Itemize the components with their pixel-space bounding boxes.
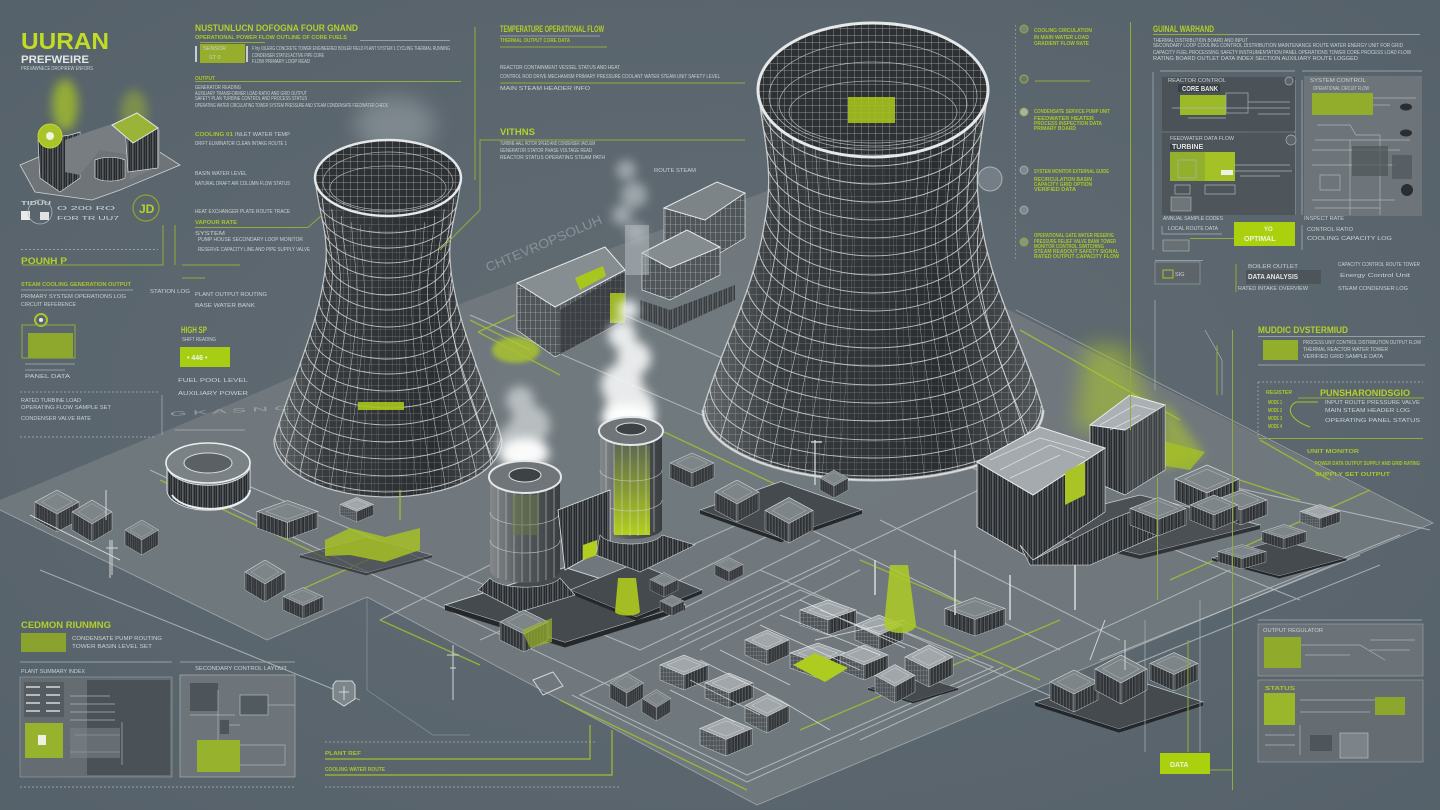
bottom left panel: CONDENSATE PUMP ROUTING — [72, 636, 162, 642]
top central text block two: THERMAL OUTPUT CORE DATA — [500, 38, 570, 44]
connecting hall — [558, 490, 610, 570]
reactor complex — [445, 417, 743, 652]
isometric ground plate — [0, 190, 1433, 805]
left mid panel: CONDENSER VALVE RATE — [21, 416, 91, 422]
top central text block one: RESERVE CAPACITY LINE AND PIPE SUPPLY VALVE — [198, 247, 310, 253]
top central text block two: CONTROL ROD DRIVE MECHANISM PRIMARY PRESSURE COOLANT WATER STEAM UNIT SAFETY LEVEL — [500, 74, 720, 80]
top central text block one: OPERATING WATER CIRCULATING TOWER SYSTEM PRESSURE AND STEAM CONDENSATE FEEDWATER CHECK — [195, 103, 388, 109]
top central text block one: OUTPUT — [195, 76, 216, 82]
left green block cluster — [300, 490, 432, 575]
top central text block one: SENSOR — [203, 46, 226, 52]
top left isometric model: TIDUU — [21, 201, 51, 207]
panel: lower left schematic — [1162, 77, 1296, 215]
top central text block two: TURBINE HALL ROTOR SPEED AND CONDENSER VACUUM — [500, 141, 595, 147]
top central text block one: DRIFT ELIMINATOR CLEAN INTAKE ROUTE 1 — [195, 141, 287, 147]
left mid panel: STATION LOG — [150, 289, 190, 295]
right mid strip: CAPACITY CONTROL ROUTE TOWER — [1338, 262, 1420, 268]
right mid strip — [1155, 260, 1420, 395]
right lower text panels: INPUT ROUTE PRESSURE VALVE — [1325, 400, 1420, 406]
callout: high speed: • 446 • — [187, 355, 208, 362]
right timeline: CAPACITY GRID OPTION — [1034, 182, 1092, 188]
right lower text panels: MODE 3 — [1268, 416, 1282, 422]
top central text block two: GENERATOR STATOR PHASE VOLTAGE READ — [500, 148, 592, 154]
back building C — [664, 182, 745, 262]
right top panel: RATING BOARD OUTLET DATA INDEX SECTION AUXILIARY ROUTE LOGGED — [1153, 56, 1358, 62]
bottom left panel: PLANT SUMMARY INDEX — [21, 669, 85, 675]
left mid panel: PANEL DATA — [25, 374, 70, 380]
top central text block one: HEAT EXCHANGER PLATE ROUTE TRACE — [195, 209, 290, 215]
right lower text panels: PUNSHARONIDSGIO — [1320, 388, 1410, 398]
right timeline: RECIRCULATION BASIN — [1034, 177, 1092, 183]
panel: lower: STATUS — [1265, 686, 1295, 692]
top central text block two: TEMPERATURE OPERATIONAL FLOW — [500, 24, 604, 34]
panel: right schematic — [180, 675, 295, 777]
right mid strip: DATA ANALYSIS — [1248, 274, 1298, 281]
top central text block one: GENERATOR READING — [195, 85, 241, 91]
green callout: YO — [1264, 227, 1273, 233]
right top panel: INSPECT RATE — [1304, 216, 1344, 222]
top central text block one: CONDENSER STATUS ACTIVE PIPE CORE — [252, 53, 324, 59]
title block: PREFWEIRE — [21, 54, 89, 66]
top left isometric model: O 200 RO — [57, 206, 117, 212]
panel: right schematic: OPERATIONAL CIRCUIT FLOW — [1313, 86, 1370, 92]
right lower text panels: THERMAL REACTOR WATER TOWER — [1303, 347, 1388, 353]
top central text block one: SYSTEM — [195, 231, 226, 237]
right lower text panels: MUDDIC DVSTERMIUD — [1258, 325, 1348, 335]
right top panel: THERMAL DISTRIBUTION BOARD AND INPUT — [1153, 38, 1249, 44]
top central text block one: OPERATIONAL POWER FLOW OUTLINE OF CORE FUELS — [195, 35, 347, 41]
right lower text panels: UNIT MONITOR — [1307, 449, 1359, 455]
right lower text panels: MODE 1 — [1268, 400, 1282, 406]
right top panel: ANNUAL SAMPLE CODES — [1163, 216, 1223, 222]
top central text block one: BASIN WATER LEVEL — [195, 171, 247, 177]
top central text block one: VAPOUR RATE — [195, 220, 237, 226]
reactor 1 — [489, 461, 561, 583]
back building A — [478, 247, 625, 375]
right mid strip: BOILER OUTLET — [1248, 264, 1299, 270]
panel: upper: OUTPUT REGULATOR — [1263, 628, 1323, 634]
lower right facility — [1035, 620, 1203, 733]
right timeline: MONITOR CONTROL SWITCHING — [1034, 244, 1104, 250]
callout: high speed: HIGH SP — [181, 325, 207, 335]
right timeline: PRIMARY BOARD — [1034, 126, 1076, 132]
left mid panel: CIRCUIT REFERENCE — [21, 302, 76, 308]
panel: lower left schematic: TURBINE — [1172, 144, 1203, 151]
top central text block one: ST 0 — [209, 55, 221, 61]
bottom left panel: CEDMON RIUNMNG — [21, 620, 111, 630]
panel: left schematic — [20, 677, 172, 777]
inner throat of small tower — [315, 140, 461, 216]
top central text block one: INLET WATER TEMP — [235, 132, 290, 138]
left mid panel: FUEL POOL LEVEL — [178, 378, 248, 384]
top central text block two: MAIN STEAM HEADER INFO — [500, 86, 591, 92]
right timeline: STEAM READOUT SAFETY SIGNAL — [1034, 249, 1120, 255]
road network — [20, 300, 1430, 790]
top central text block two: REACTOR STATUS OPERATING STEAM PATH — [500, 155, 605, 161]
left mid panel: STEAM COOLING GENERATION OUTPUT — [21, 282, 132, 288]
top central text block one: NATURAL DRAFT AIR COLUMN FLOW STATUS — [195, 181, 290, 187]
right timeline: COOLING CIRCULATION — [1034, 28, 1092, 34]
right timeline: OPERATIONAL GATE WATER RESERVE — [1034, 233, 1114, 239]
right strip building — [1212, 504, 1346, 578]
right timeline: PROCESS INSPECTION DATA — [1034, 121, 1102, 127]
bottom centre note: PLANT REF — [325, 751, 362, 757]
panel: upper left schematic: CORE BANK — [1182, 86, 1218, 93]
top central text block one: AUXILIARY TRANSFORMER LOAD RATIO AND GRID OUTPUT — [195, 91, 307, 97]
right lower text panels: REGISTER — [1266, 390, 1292, 396]
panel: right schematic: SYSTEM CONTROL — [1310, 78, 1366, 84]
green well — [615, 578, 640, 616]
top left isometric model: FOR TR UU7 — [57, 216, 119, 222]
top central text block two — [483, 24, 745, 275]
top central text block two: CHTEVROPSOLUH — [483, 212, 604, 275]
right mid strip: SIG — [1175, 272, 1184, 278]
panel: lower left schematic: FEEDWATER DATA FLOW — [1170, 136, 1235, 142]
round gauge beside tower — [978, 167, 1002, 191]
panel: upper — [1258, 624, 1423, 676]
panel: right schematic — [1304, 76, 1422, 216]
right top panel: GUINAL WARHAND — [1153, 24, 1214, 34]
right lower text panels: SUPPLY SET OUTPUT — [1315, 472, 1391, 478]
top central text block one: PUMP HOUSE SECONDARY LOOP MONITOR — [198, 237, 303, 243]
green band on small tower — [358, 402, 404, 410]
left mid panel — [20, 256, 292, 435]
green callout — [1160, 753, 1210, 774]
right timeline: VERIFIED DATA — [1034, 187, 1076, 193]
green callout — [1234, 222, 1295, 246]
right lower text panels: VERIFIED GRID SAMPLE DATA — [1303, 354, 1383, 360]
left mid panel: RATED TURBINE LOAD — [21, 398, 81, 404]
right top panel: COOLING CAPACITY LOG — [1307, 236, 1392, 242]
right top panel: LOCAL ROUTE DATA — [1168, 226, 1218, 232]
right timeline: CONDENSATE SERVICE PUMP UNIT — [1034, 109, 1111, 115]
top central text block one: NUSTUNLUCN DOFOGNA FOUR GNAND — [195, 23, 358, 33]
left mid panel: G K A S N C — [170, 406, 292, 418]
top central text block one — [21, 23, 745, 265]
green glow inside large tower — [848, 97, 895, 123]
reactor 2 — [599, 417, 663, 539]
top central text block two: REACTOR CONTAINMENT VESSEL STATUS AND HEAT — [500, 65, 621, 71]
steam plumes — [496, 160, 654, 468]
callout: high speed: SHIFT READING — [182, 337, 216, 343]
right big facility — [977, 345, 1267, 565]
top left isometric model — [20, 79, 180, 224]
bottom left panel — [20, 620, 295, 777]
inner throat of large tower — [758, 23, 988, 157]
small pylons and shield icon — [106, 540, 563, 706]
top central text block two: VITHNS — [500, 127, 535, 137]
left mid panel: BASE WATER BANK — [195, 303, 255, 309]
steam: small tower glow — [355, 97, 435, 153]
callout: high speed — [180, 325, 230, 367]
top left isometric model: JD — [139, 202, 155, 216]
right mid strip: RATED INTAKE OVERVIEW — [1238, 286, 1309, 292]
left mid panel: AUXILIARY POWER — [178, 391, 248, 397]
right timeline — [1016, 22, 1130, 430]
left mid panel: PLANT OUTPUT ROUTING — [195, 292, 267, 298]
left tank cluster — [30, 443, 323, 619]
small cooling tower — [273, 138, 502, 498]
bottom centre note — [325, 751, 385, 773]
top central text block one: COOLING 01 — [195, 132, 233, 138]
left mid panel: PRIMARY SYSTEM OPERATIONS LOG — [21, 294, 126, 300]
right lower text panels: MODE 4 — [1268, 424, 1283, 430]
title block: UURAN — [21, 28, 109, 54]
bottom left panel: TOWER BASIN LEVEL SET — [72, 644, 153, 650]
title block — [21, 28, 109, 72]
mid right buildings — [670, 440, 862, 543]
right top panel: CONTROL RATIO — [1307, 227, 1354, 233]
right timeline: IN MAIN WATER LOAD — [1034, 35, 1089, 41]
right lower text panels: OPERATING PANEL STATUS — [1325, 418, 1420, 424]
right lower text panels: MAIN STEAM HEADER LOG — [1325, 408, 1410, 414]
bottom centre note: COOLING WATER ROUTE — [325, 767, 385, 773]
large cooling tower — [702, 22, 1044, 482]
panel: lower — [1258, 680, 1423, 762]
top central text block two: ROUTE STEAM — [654, 168, 696, 174]
right mid strip: STEAM CONDENSER LOG — [1338, 286, 1408, 292]
lower central campus — [610, 550, 1075, 756]
right lower text panels — [1158, 325, 1425, 790]
green callout: DATA — [1170, 762, 1188, 769]
right timeline: PRESSURE RELIEF VALVE BANK TOWER — [1034, 239, 1116, 245]
left mid panel: OPERATING FLOW SAMPLE SET — [21, 405, 112, 411]
right mid strip: Energy Control Unit — [1340, 273, 1411, 279]
right top panel — [1153, 24, 1422, 251]
top central text block one: F hly OILERG CONCRETE TOWER ENGINEERED BOILER FIELD PLANT SYSTEM 1 CYCLING THERMAL RUNNING — [252, 46, 450, 52]
right timeline: GRADIENT FLOW RATE — [1034, 41, 1089, 47]
title block: PREVAWNECE DROPIREW ENFORS — [21, 66, 93, 72]
back building B — [640, 230, 735, 330]
right lower text panels: MODE 2 — [1268, 408, 1282, 414]
bottom right panels — [1145, 600, 1423, 774]
round badge — [133, 195, 159, 221]
right timeline: FEEDWATER HEATER — [1034, 116, 1094, 122]
left mid panel: POUNH P — [21, 256, 67, 266]
green callout: OPTIMAL — [1244, 236, 1276, 243]
bottom left panel: SECONDARY CONTROL LAYOUT — [195, 666, 288, 672]
top central text block one: FLOW PRIMARY LOOP READ — [252, 59, 310, 65]
top central text block one: SAFETY PLAN TURBINE CONTROL AND PROCESS STATUS — [195, 96, 307, 102]
panel: upper left schematic — [1162, 77, 1295, 131]
right timeline: SYSTEM MONITOR EXTERNAL GUIDE — [1034, 169, 1109, 175]
panel: upper left schematic: REACTOR CONTROL — [1168, 78, 1226, 84]
right timeline: RATED OUTPUT CAPACITY FLOW — [1034, 254, 1120, 260]
